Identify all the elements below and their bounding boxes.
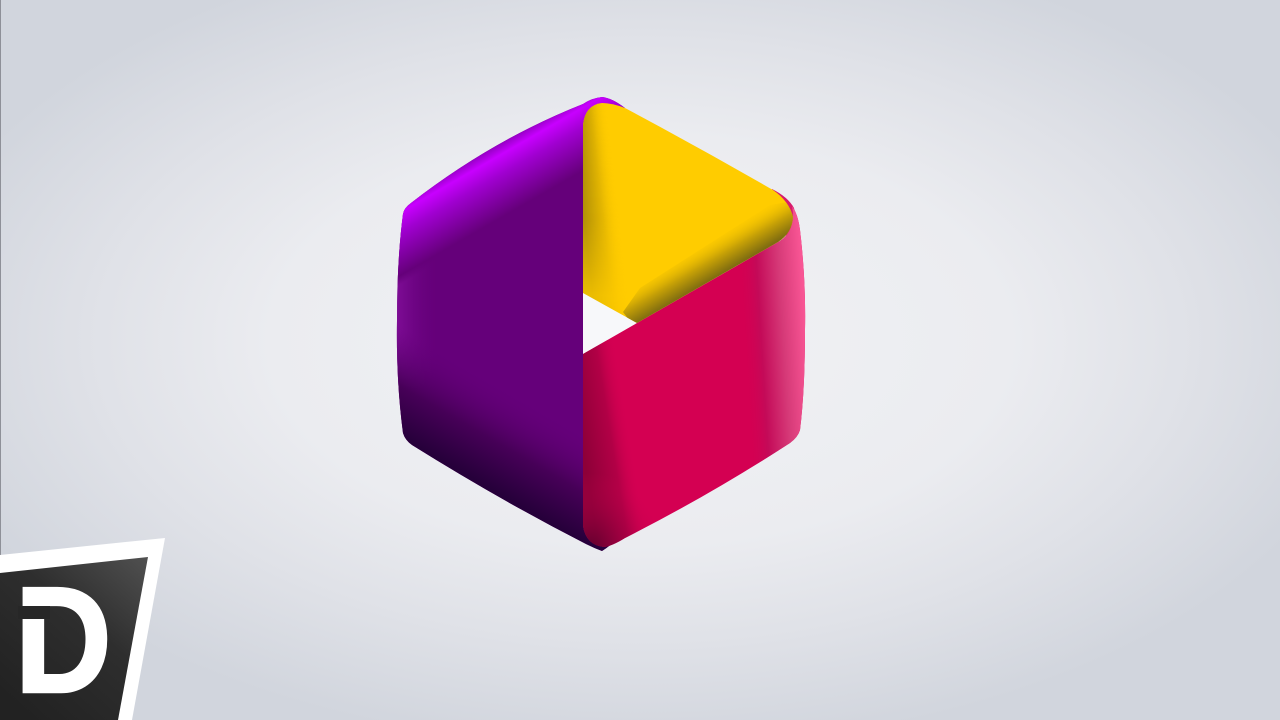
hexagon logo	[390, 90, 810, 560]
pink back sliver behind yellow corner	[770, 189, 798, 240]
badge white frame	[0, 538, 165, 720]
pink panel	[580, 200, 810, 560]
badge letter notch	[18, 606, 50, 619]
badge letter D: D	[15, 557, 112, 720]
badge dark panel	[0, 557, 148, 720]
yellow panel	[583, 103, 793, 323]
brand badge	[0, 538, 165, 720]
purple panel	[396, 97, 625, 551]
white centre triangle	[582, 292, 640, 355]
